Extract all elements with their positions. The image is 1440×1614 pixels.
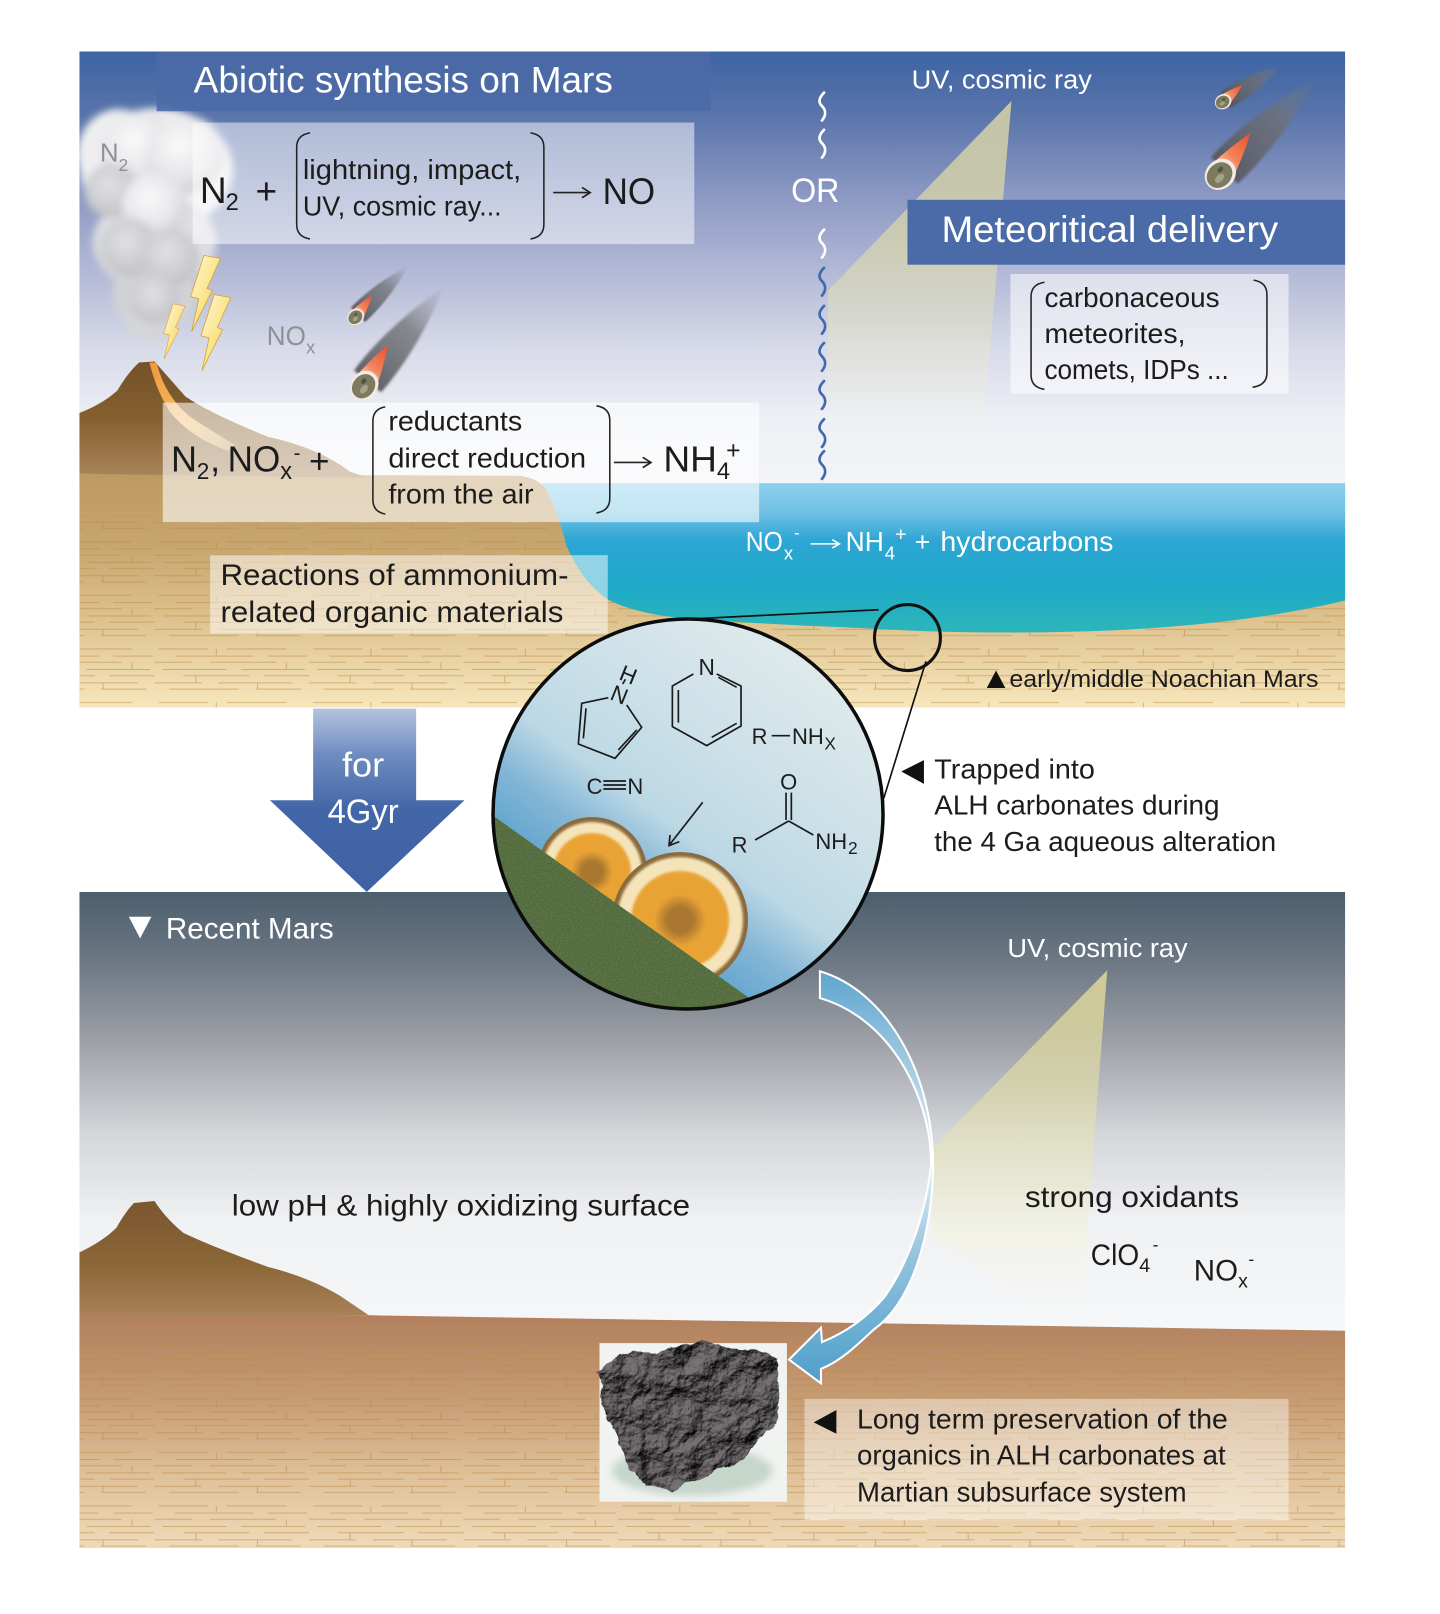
carbonate globule right — [612, 852, 748, 988]
molecule: amide — [732, 770, 858, 858]
molecules — [578, 654, 858, 858]
label: ClO4- — [1092, 1244, 1158, 1272]
grey label NOx: x — [306, 336, 316, 357]
formula box: to NH4+: + — [309, 442, 329, 481]
rock wedge — [470, 810, 752, 1030]
text box: reactions of organic materials: Reactions of ammonium- — [220, 559, 569, 592]
formula box: N2 to NO — [193, 123, 694, 244]
grey label N2 — [102, 144, 128, 171]
text box: reactions of organic materials — [210, 555, 608, 633]
arrow: for 4Gyr: 4Gyr — [328, 793, 399, 831]
grey label NOx: NO — [267, 321, 306, 351]
molecule: amide: 2 — [848, 838, 858, 858]
label: NOx- — [1196, 1260, 1254, 1288]
heading band: Meteoritical delivery — [907, 200, 1345, 265]
squiggle divider — [820, 93, 825, 479]
formula box: to NH4+: + — [726, 437, 741, 464]
panel: recent Mars scene — [79, 892, 1345, 1548]
label: surface conditions: low pH & highly oxidizing surface — [232, 1189, 690, 1222]
molecule: pyrrole — [578, 660, 642, 758]
label: early/middle Noachian Mars: early/middle Noachian Mars — [1009, 667, 1318, 693]
grey label N2: N — [100, 140, 119, 168]
circle outline — [493, 619, 883, 1009]
label: ocean reaction: + — [895, 524, 907, 546]
formula box: to NH4+ — [163, 403, 759, 522]
molecule: C≡N: C — [587, 774, 603, 799]
formula box: to NH4+: direct reduction — [388, 443, 586, 474]
carbonate globule left — [537, 817, 647, 927]
lava flow — [149, 363, 235, 451]
formula box: to NH4+: - — [294, 441, 300, 464]
formula box: N2 to NO: lightning, impact, — [303, 154, 521, 185]
formula box: to NH4+: N — [171, 439, 197, 480]
formula box: to NH4+: NH — [663, 439, 717, 480]
label: NOx-: - — [1248, 1249, 1254, 1269]
formula box: N2 to NO: NO — [603, 170, 655, 212]
heading band: Abiotic synthesis on Mars: Abiotic synthesis on Mars — [194, 59, 613, 101]
molecule: amide: NH — [815, 829, 847, 854]
arrow: for 4Gyr — [270, 709, 465, 892]
water background — [493, 619, 883, 1009]
subsurface ground — [79, 1313, 1345, 1548]
molecule: R-NHx: R — [752, 724, 768, 749]
formula box: to NH4+: 2 — [197, 458, 209, 484]
arrow: for 4Gyr: for — [342, 747, 384, 785]
volcano — [79, 362, 368, 478]
text box: carbonaceous meteorites — [1010, 274, 1289, 393]
molecule: C≡N — [587, 774, 643, 799]
label: ocean reaction: 4 — [885, 542, 895, 563]
text box: reactions of organic materials: related organic materials — [220, 596, 563, 629]
label: ocean reaction: x — [784, 542, 794, 563]
molecule: pyrrole: H — [616, 660, 641, 690]
sky gradient — [79, 892, 1345, 1335]
molecule: R-NHx — [752, 724, 836, 753]
text box: carbonaceous meteorites: carbonaceous — [1044, 282, 1220, 313]
formula box: to NH4+: , — [210, 439, 220, 480]
text box: long term preservation: Long term preservation of the — [857, 1404, 1228, 1435]
molecule: R-NHx: X — [824, 733, 836, 753]
formula box: N2 to NO: + — [255, 170, 277, 212]
meteors right — [1204, 68, 1308, 190]
label: ClO4-: - — [1153, 1234, 1159, 1254]
panel: early/middle Noachian Mars scene — [77, 51, 1345, 708]
text box: carbonaceous meteorites: meteorites, — [1044, 318, 1186, 349]
formula box: to NH4+: NO — [228, 439, 280, 480]
arrow: trapped into carbonates — [669, 802, 703, 846]
label: ClO4-: 4 — [1139, 1255, 1150, 1277]
label: NOx-: NO — [1194, 1254, 1238, 1287]
formula box: to NH4+: 4 — [717, 459, 730, 485]
grey label NOx — [268, 326, 315, 354]
formula box: to NH4+: from the air — [388, 479, 534, 510]
UV light beam — [828, 101, 1012, 380]
label: ocean reaction: NO — [746, 526, 783, 557]
sediment layer texture — [79, 1339, 1345, 1548]
molecule: R-NHx: NH — [792, 724, 824, 749]
sand ground — [79, 474, 1345, 708]
text box: carbonaceous meteorites: comets, IDPs ... — [1044, 354, 1229, 385]
heading band: Abiotic synthesis on Mars — [157, 51, 711, 111]
heading band: Meteoritical delivery: Meteoritical delivery — [941, 208, 1279, 250]
label: Recent Mars: Recent Mars — [166, 912, 334, 945]
label: ocean reaction: hydrocarbons — [940, 526, 1113, 557]
curved arrow: to long term preservation — [789, 971, 933, 1383]
formula box: to NH4+: reductants — [388, 406, 522, 437]
zoom lines — [688, 610, 926, 798]
label: ocean reaction: + — [915, 527, 930, 557]
text box: long term preservation — [804, 1399, 1289, 1520]
grey label N2: 2 — [118, 155, 128, 175]
lightning bolts — [164, 255, 231, 371]
formula box: N2 to NO: N — [200, 169, 227, 211]
label: ocean reaction: - — [794, 525, 800, 543]
molecule: C≡N: N — [627, 774, 643, 799]
molecule: pyridine: N — [699, 654, 715, 680]
label: ClO4-: ClO — [1091, 1239, 1139, 1272]
formula box: to NH4+: x — [280, 459, 292, 485]
formula box: N2 to NO: UV, cosmic ray... — [303, 190, 502, 221]
molecule: amide: O — [780, 770, 797, 795]
text: trapped into ALH carbonates: Trapped into — [934, 754, 1095, 785]
magnified circle: carbonates and organics — [470, 619, 883, 1030]
sediment layer texture — [79, 515, 1345, 708]
molecule: amide: R — [732, 832, 748, 857]
photo: ALH meteorite — [596, 1342, 787, 1502]
meteors left — [348, 269, 440, 400]
sky gradient — [79, 51, 1345, 484]
label: Recent Mars — [128, 916, 333, 939]
volcano — [79, 1201, 369, 1315]
text: trapped into ALH carbonates: the 4 Ga aqueous alteration — [934, 826, 1276, 857]
formula box: N2 to NO: 2 — [226, 190, 239, 216]
text: trapped into ALH carbonates — [901, 754, 1276, 857]
label: OR: OR — [791, 172, 839, 210]
small magnifier circle — [874, 605, 940, 671]
label: NOx-: x — [1238, 1270, 1248, 1292]
label: UV, cosmic ray: UV, cosmic ray — [912, 67, 1092, 95]
text box: long term preservation: organics in ALH carbonates at — [857, 1440, 1226, 1471]
label: strong oxidants: strong oxidants — [1025, 1181, 1239, 1214]
text: trapped into ALH carbonates: ALH carbonates during — [934, 790, 1220, 821]
label: UV, cosmic ray: UV, cosmic ray — [1007, 935, 1188, 963]
UV light beam — [932, 970, 1108, 1254]
text box: long term preservation: Martian subsurface system — [857, 1477, 1187, 1508]
volcanic cloud — [77, 108, 233, 340]
label: ocean reaction — [748, 530, 1112, 560]
ocean — [542, 483, 1345, 633]
molecule: pyrrole: N — [607, 680, 632, 710]
label: ocean reaction: NH — [846, 526, 884, 557]
molecule: pyridine — [672, 654, 741, 746]
